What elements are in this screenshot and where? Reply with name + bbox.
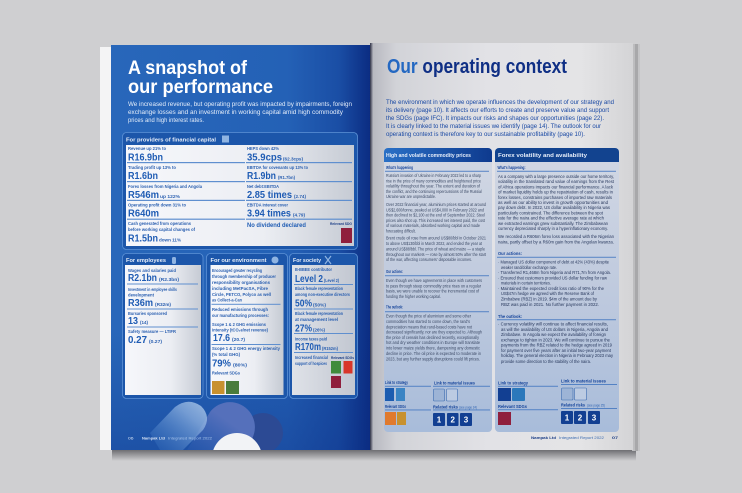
section: our actions: US$47m hedge we agreed with the Reserve Bank of — [501, 291, 595, 296]
intro paragraph — [386, 99, 614, 138]
section: the outlook: provide some direction to the stability of the naira. — [501, 359, 591, 364]
metric: interest cover: 3.94 times — [247, 208, 291, 220]
section: what's happening: to above US$130/bbl in March 2022, and ended the year at — [386, 241, 483, 246]
panel: for society: (50%) — [313, 302, 326, 308]
relevant SDGs: Relevant SDGs — [498, 404, 527, 409]
metric: HEPS — [247, 146, 303, 164]
panel: for society: (R152m) — [322, 346, 338, 351]
metric: EBITDA for covenants: R1.9bn — [247, 170, 276, 182]
section: the outlook — [497, 314, 616, 364]
metric: forex losses — [128, 184, 202, 201]
metric: trading profit — [128, 165, 176, 182]
section: our actions: · Maintained the expected credit loss ratio of 90% for the — [498, 286, 604, 291]
section: what's happening: Brent crude oil rose from around US$80/bbl in October 2021 — [386, 236, 487, 240]
section: what's happening: Russia's invasion of Ukraine in February 2022 led to a sharp — [386, 173, 482, 178]
section: the outlook: hot and dry weather conditions in Europe will translate — [386, 340, 481, 345]
section: what's happening: particularly constrained. The difference between the spot — [498, 210, 604, 215]
related risks: (see page 25) — [587, 404, 605, 408]
metric: EBITDA for covenants — [247, 165, 308, 182]
related risks: 3 — [592, 414, 597, 422]
section: our actions: · Transferred R1,468m from Nigeria and R71,7m from Angola. — [498, 270, 611, 275]
panel: for our environment: intensity (tCO₂e/net revenue) — [212, 328, 268, 332]
panel: for employees: Safety measure — LTIFR — [128, 329, 177, 334]
intro paragraph: We increased revenue, but operating profit was impacted by impairments, foreign — [128, 101, 352, 108]
panel: for employees: R36m — [128, 297, 153, 309]
panel: for society: B-BBEE contributor — [295, 267, 332, 272]
related risks — [561, 403, 617, 424]
section: our actions: · Ensured that customers provided US dollar funding for raw — [498, 275, 608, 280]
panel heading: High and volatile commodity prices — [386, 153, 471, 159]
panel: for society: (26%) — [313, 328, 325, 332]
page footer: 07 — [612, 436, 618, 440]
section: the outlook: Zimbabwe. In Angola we expect the availability of foreign — [501, 332, 606, 337]
section: the outlook: commodities has started to come down, the rand's — [386, 319, 470, 324]
link to strategy: Link to strategy — [498, 380, 528, 385]
metric: HEPS: 35.9cps — [247, 152, 282, 164]
intro paragraph: its delivery (page 10). It affects our efforts to create and preserve value and support — [386, 107, 609, 114]
panel: for our environment: (% total GHG) — [212, 352, 240, 357]
section: our actions: materials in certain territories. — [501, 281, 551, 286]
SDG icons — [331, 361, 352, 388]
intro paragraph: operating context is therefore key to our sustainable profitability (page 10). — [386, 131, 585, 138]
blue page background — [111, 45, 370, 450]
section: the outlook: The outlook: — [498, 314, 522, 319]
page footer: Nampak Ltd — [142, 436, 166, 440]
intro paragraph — [128, 101, 352, 124]
section: our actions — [385, 269, 489, 299]
SDG icons — [212, 381, 239, 394]
section: what's happening: as well as our ability to invest in growth opportunities and — [498, 200, 608, 205]
related risks: Related risks — [561, 403, 585, 408]
metric: interest cover: EBITDA interest cover — [247, 203, 288, 208]
icon: employee — [172, 257, 176, 264]
panel: for our environment — [206, 254, 288, 398]
metric: forex losses: Forex losses from Nigeria and Angola — [128, 184, 202, 189]
icon: society — [325, 256, 331, 264]
panel: for employees: (0.27) — [149, 339, 162, 344]
section: what's happening: around US$88/bbl. The price of wheat and maize — a staple — [386, 246, 486, 252]
panel: for our environment: For our environment — [210, 258, 267, 264]
section: what's happening: As a company with a large presence outside our home territory, — [498, 174, 614, 179]
section: the outlook: the price of cereals has declined recently, exceptionally — [386, 335, 480, 340]
section: what's happening: volatility throughout the year. The extent and duration of — [386, 184, 481, 189]
panel heading: Forex volatility and availability — [498, 153, 588, 159]
metric: forex losses: up 122% — [160, 194, 180, 199]
title: our performance — [128, 76, 273, 98]
section: what's happening: forecasting difficult. — [386, 228, 416, 234]
panel: providers of financial capital — [122, 132, 358, 250]
section: our actions: Zimbabwe (RBZ) in 2019. $4m of the amount due by — [501, 296, 598, 301]
section: what's happening: currency depreciated sharply in a hyperinflationary economy. — [498, 226, 608, 231]
section: what's happening: Over 2022 financial year, aluminium prices started at around — [386, 202, 487, 207]
section: what's happening: pay down debt. In 2022, US dollar availability in Nigeria was — [498, 205, 611, 210]
section: our actions: weaker rand/dollar exchange rate. — [501, 265, 557, 270]
section: what's happening: We recorded a R606m forex loss associated with the Nigerian — [498, 234, 614, 239]
panel: for our environment: including MetPacSA, Fibre — [212, 286, 268, 291]
panel: for our environment: 79% — [212, 358, 232, 370]
related risks: 2 — [450, 416, 455, 424]
section: the outlook: 2023, but any further supply disruptions could lift prices. — [386, 356, 480, 362]
metric: revenue: R16.9bn — [128, 152, 163, 164]
panel: for employees: (14) — [140, 320, 148, 325]
title: Our operating context — [387, 56, 567, 78]
metric: cash generated — [128, 221, 195, 244]
section: what's happening: rate for the naira and the effective average rate at which — [498, 216, 604, 221]
metric: dividend: No dividend declared — [247, 222, 306, 229]
section: our actions: Our actions: — [386, 269, 403, 274]
metric: operating profit — [128, 203, 186, 220]
page footer: 06 — [128, 436, 134, 440]
section: the outlook: for payment over five years after an initial two-year payment — [501, 348, 612, 353]
section: what's happening — [497, 165, 616, 244]
section: what's happening: volatility in the translated rand value of earnings from the Rest — [498, 179, 615, 184]
panel: for our environment: Relevant SDGs — [212, 370, 240, 376]
panel: for our environment: Encouraged greater recycling — [212, 268, 262, 273]
panel: commodity prices — [384, 148, 492, 432]
panel: for society: (Level 2) — [324, 278, 339, 283]
metric: interest cover: (4.79) — [293, 213, 305, 218]
page footer: Integrated Report 2022 — [559, 436, 604, 440]
panel: for society: For society — [293, 258, 322, 264]
page footer: Nampak Ltd — [531, 436, 557, 440]
intro paragraph: It is clearly linked to the material issues we identify (page 14). The outlook for our — [386, 123, 601, 130]
metric: cash generated: down 11% — [159, 238, 181, 242]
intro paragraph: exchange losses and an investment in working capital amid high commodity — [128, 109, 344, 116]
title: A snapshot of — [128, 57, 247, 79]
panel: for employees: 13 — [128, 315, 138, 327]
section: our actions — [497, 251, 616, 307]
metric: net debt: (2.74) — [294, 194, 306, 199]
link to strategy — [498, 380, 558, 401]
section: the outlook: decreased significantly, nor are they expected to. Although — [386, 330, 483, 335]
related risks: (see page 24) — [459, 406, 477, 410]
metric: EBITDA for covenants: (R1.7bn) — [278, 175, 295, 180]
metric: interest cover — [247, 203, 305, 220]
panel: for our environment: as Collect-a-Can — [212, 298, 242, 302]
page footer — [531, 436, 618, 440]
panel: for our environment: through membership of producer — [212, 274, 276, 279]
section: what's happening: What's happening — [386, 165, 413, 170]
panel: for society: among non-executive directors — [295, 292, 350, 297]
section: what's happening: throughout our markets — rose by almost 50% after the start — [386, 252, 487, 257]
decorative cloud shapes — [150, 402, 283, 450]
section: what's happening: the conflict, and the continuing repercussions of the Russia/ — [386, 189, 483, 194]
section: what's happening: forex losses, constrains purchases of imported raw materials — [498, 195, 613, 200]
panel: providers of financial capital: For providers of financial capital — [126, 138, 216, 144]
relevant SDGs — [385, 404, 431, 425]
page footer: Integrated Report 2022 — [168, 436, 212, 440]
metric: net debt: 2.85 times — [247, 189, 292, 201]
panel: for employees: Bursaries sponsored — [128, 311, 167, 316]
metric: trading profit: Trading profit up 13% to — [128, 165, 176, 170]
panel: for employees: Investment in employee skills — [128, 287, 177, 292]
section: what's happening: rise in the price of many commodities and heightened price — [386, 178, 482, 183]
panel: for society: Level 2 — [295, 273, 323, 285]
panel: for society: Increased financial — [295, 355, 328, 360]
panel: for employees: Wages and salaries paid — [128, 268, 176, 273]
section: the outlook: into lower maize yields there, dampening any domestic — [386, 346, 480, 350]
section: what's happening — [385, 165, 489, 262]
section: what's happening: US$2,600/tonne, peaked at US$4,000 in February 2022 and — [386, 207, 485, 212]
panel: for society: Black female representation — [295, 311, 343, 316]
metric: revenue: Revenue up 21% to — [128, 146, 166, 151]
section: what's happening: Ukraine war are unpredictable. — [386, 194, 436, 199]
section: our actions: Even though we have agreements in place with customers — [386, 278, 482, 283]
section: the outlook: The outlook: — [386, 304, 403, 310]
panel: for our environment: 17.6 — [213, 332, 230, 344]
link to material issues — [433, 380, 490, 401]
intro paragraph: the SDGs (page IFC). It impacts our risks and shapes our opportunities (page 22). — [386, 115, 604, 122]
section: the outlook — [385, 304, 489, 362]
section: the outlook: exchange to tighten in 2023. We will continue to pursue the — [501, 337, 610, 342]
metric: trading profit: R1.6bn — [128, 170, 158, 182]
page edge — [100, 47, 112, 450]
section: what's happening: then declined to $2,100 at the end of September 2022. Steel — [386, 213, 485, 218]
icon: capital — [222, 136, 229, 142]
panel: for employees: R2.1bn — [128, 272, 157, 284]
panel: for our environment: responsibility organisations — [212, 280, 270, 285]
related risks: 1 — [437, 416, 442, 424]
related risks: 2 — [578, 414, 583, 422]
section: what's happening: What's happening: — [498, 165, 526, 170]
panel: for society: Income taxes paid — [295, 336, 327, 342]
book shadow — [112, 450, 636, 461]
section: our actions: RBZ was paid in 2021. No further payment in 2022. — [501, 302, 599, 307]
panel: for society: Black female representation — [295, 286, 343, 291]
page footer — [128, 436, 212, 440]
panel heading — [495, 148, 619, 162]
relevant SDGs — [498, 404, 558, 425]
relevant SDG: Relevant SDG — [330, 222, 352, 226]
link to material issues: Link to material issues — [434, 380, 475, 386]
related risks: Related risks — [433, 404, 458, 410]
panel: for our environment: our manufacturing processes: — [212, 313, 269, 318]
section: what's happening: naira, partly offset by a R60m gain from the Angolan kwanza. — [498, 239, 614, 244]
panel: for society: at management level — [295, 317, 338, 322]
panel heading — [384, 148, 492, 162]
panel: for employees: For employees — [126, 258, 166, 264]
section: the outlook: holiday. The general election in Nigeria in February 2023 may — [501, 353, 614, 358]
link to strategy: Link to strategy — [385, 380, 408, 385]
panel: for society: 50% — [295, 298, 313, 310]
metric: EBITDA for covenants: EBITDA for covenants up 13% to — [247, 165, 308, 170]
title — [128, 57, 273, 98]
link to material issues: Link to material issues — [561, 379, 606, 384]
panel: for our environment: (20.7) — [232, 337, 245, 342]
panel: for society: Relevant SDGs — [331, 356, 354, 360]
panel: for our environment: Scope 1 & 2 GHG energy intensity — [212, 346, 280, 351]
panel: for our environment: Reduced emissions through — [212, 307, 268, 312]
page stack edge — [632, 44, 640, 451]
metric: net debt — [247, 184, 306, 201]
panel: for society: support of hospices — [295, 361, 327, 366]
metric: net debt: Net debt:EBITDA — [247, 184, 280, 189]
section: what's happening: prices also shot up. This increased net interest paid, the cost — [386, 218, 486, 223]
panel: forex volatility — [495, 148, 619, 432]
panel: for employees: (R2.3bn) — [159, 277, 180, 282]
panel: for employees: development — [128, 292, 154, 298]
icon: environment — [272, 256, 278, 264]
section: what's happening: of market liquidity holds up the repatriation of cash, results in — [498, 190, 613, 195]
section: the outlook: Even though the price of aluminium and some other — [386, 314, 472, 319]
section: the outlook: depreciation means that rand-based costs have not — [386, 324, 473, 329]
section: our actions: to pass through steep commodity price rises on a regular — [386, 283, 482, 288]
metric: operating profit: R640m — [128, 208, 159, 220]
section: the outlook: payments from the RBZ related to the hedge agreed in 2019 — [501, 343, 612, 348]
section: our actions: funding the higher working capital. — [386, 294, 441, 299]
related risks: 1 — [565, 414, 570, 422]
page background — [370, 43, 633, 450]
panel: for our environment: Circle, PETCO, Polyco as well — [212, 292, 271, 297]
related risks — [433, 404, 490, 426]
panel: for employees: 0.27 — [128, 334, 147, 346]
metric: forex losses: R546m — [128, 189, 159, 201]
relevant SDGs: Relevant SDGs — [385, 404, 406, 409]
panel: for our environment: Scope 1 & 2 GHG emissions — [212, 322, 266, 327]
section: our actions: Our actions: — [498, 251, 522, 256]
metric: HEPS: HEPS down 42% — [247, 146, 279, 151]
section: what's happening: we extracted earnings grew substantially. The Zimbabwean — [498, 221, 608, 226]
metric: cash generated: Cash generated from operations — [128, 221, 191, 226]
panel: for society: 27% — [295, 322, 313, 334]
metric: cash generated: before working capital changes of — [128, 227, 195, 232]
panel: for our environment: (80%) — [233, 363, 248, 368]
metric: operating profit: Operating profit down 31% to — [128, 203, 186, 208]
panel: for society — [290, 254, 358, 398]
panel: for employees: (R32m) — [155, 302, 171, 307]
intro paragraph: prices and high interest rates. — [128, 117, 204, 124]
section: the outlook: · Currency volatility will continue to affect financial results, — [498, 322, 608, 327]
related risks: 3 — [464, 416, 469, 424]
left page — [100, 45, 370, 483]
metric: HEPS: (62.3cps) — [283, 156, 303, 162]
right page — [370, 43, 640, 451]
panel: for society: R170m — [295, 341, 321, 353]
section: our actions: · Managed US dollar component of debt at 42% (43%) despite — [498, 260, 609, 265]
section: what's happening: of the war, affecting consumers' disposable incomes. — [386, 257, 472, 262]
intro paragraph: The environment in which we operate influences the development of our strategy and — [386, 99, 614, 106]
section: what's happening: of various materials, absorbed working capital and made — [386, 223, 481, 228]
section: our actions: basis, we were unable to recover the incremental cost of — [386, 289, 480, 294]
link to strategy — [385, 380, 431, 401]
section: what's happening: of Africa operations impacts our financial performance. A lack — [498, 184, 614, 189]
metric: revenue — [128, 146, 166, 164]
section: the outlook: decline in price. The oil price is expected to moderate in — [386, 351, 482, 356]
relevant SDG — [330, 222, 352, 243]
panel: for employees — [122, 254, 203, 398]
metric: cash generated: R1.5bn — [128, 232, 158, 244]
link to material issues — [561, 379, 617, 400]
section: the outlook: as will the availability of US dollars in Nigeria, Angola and — [501, 327, 608, 332]
